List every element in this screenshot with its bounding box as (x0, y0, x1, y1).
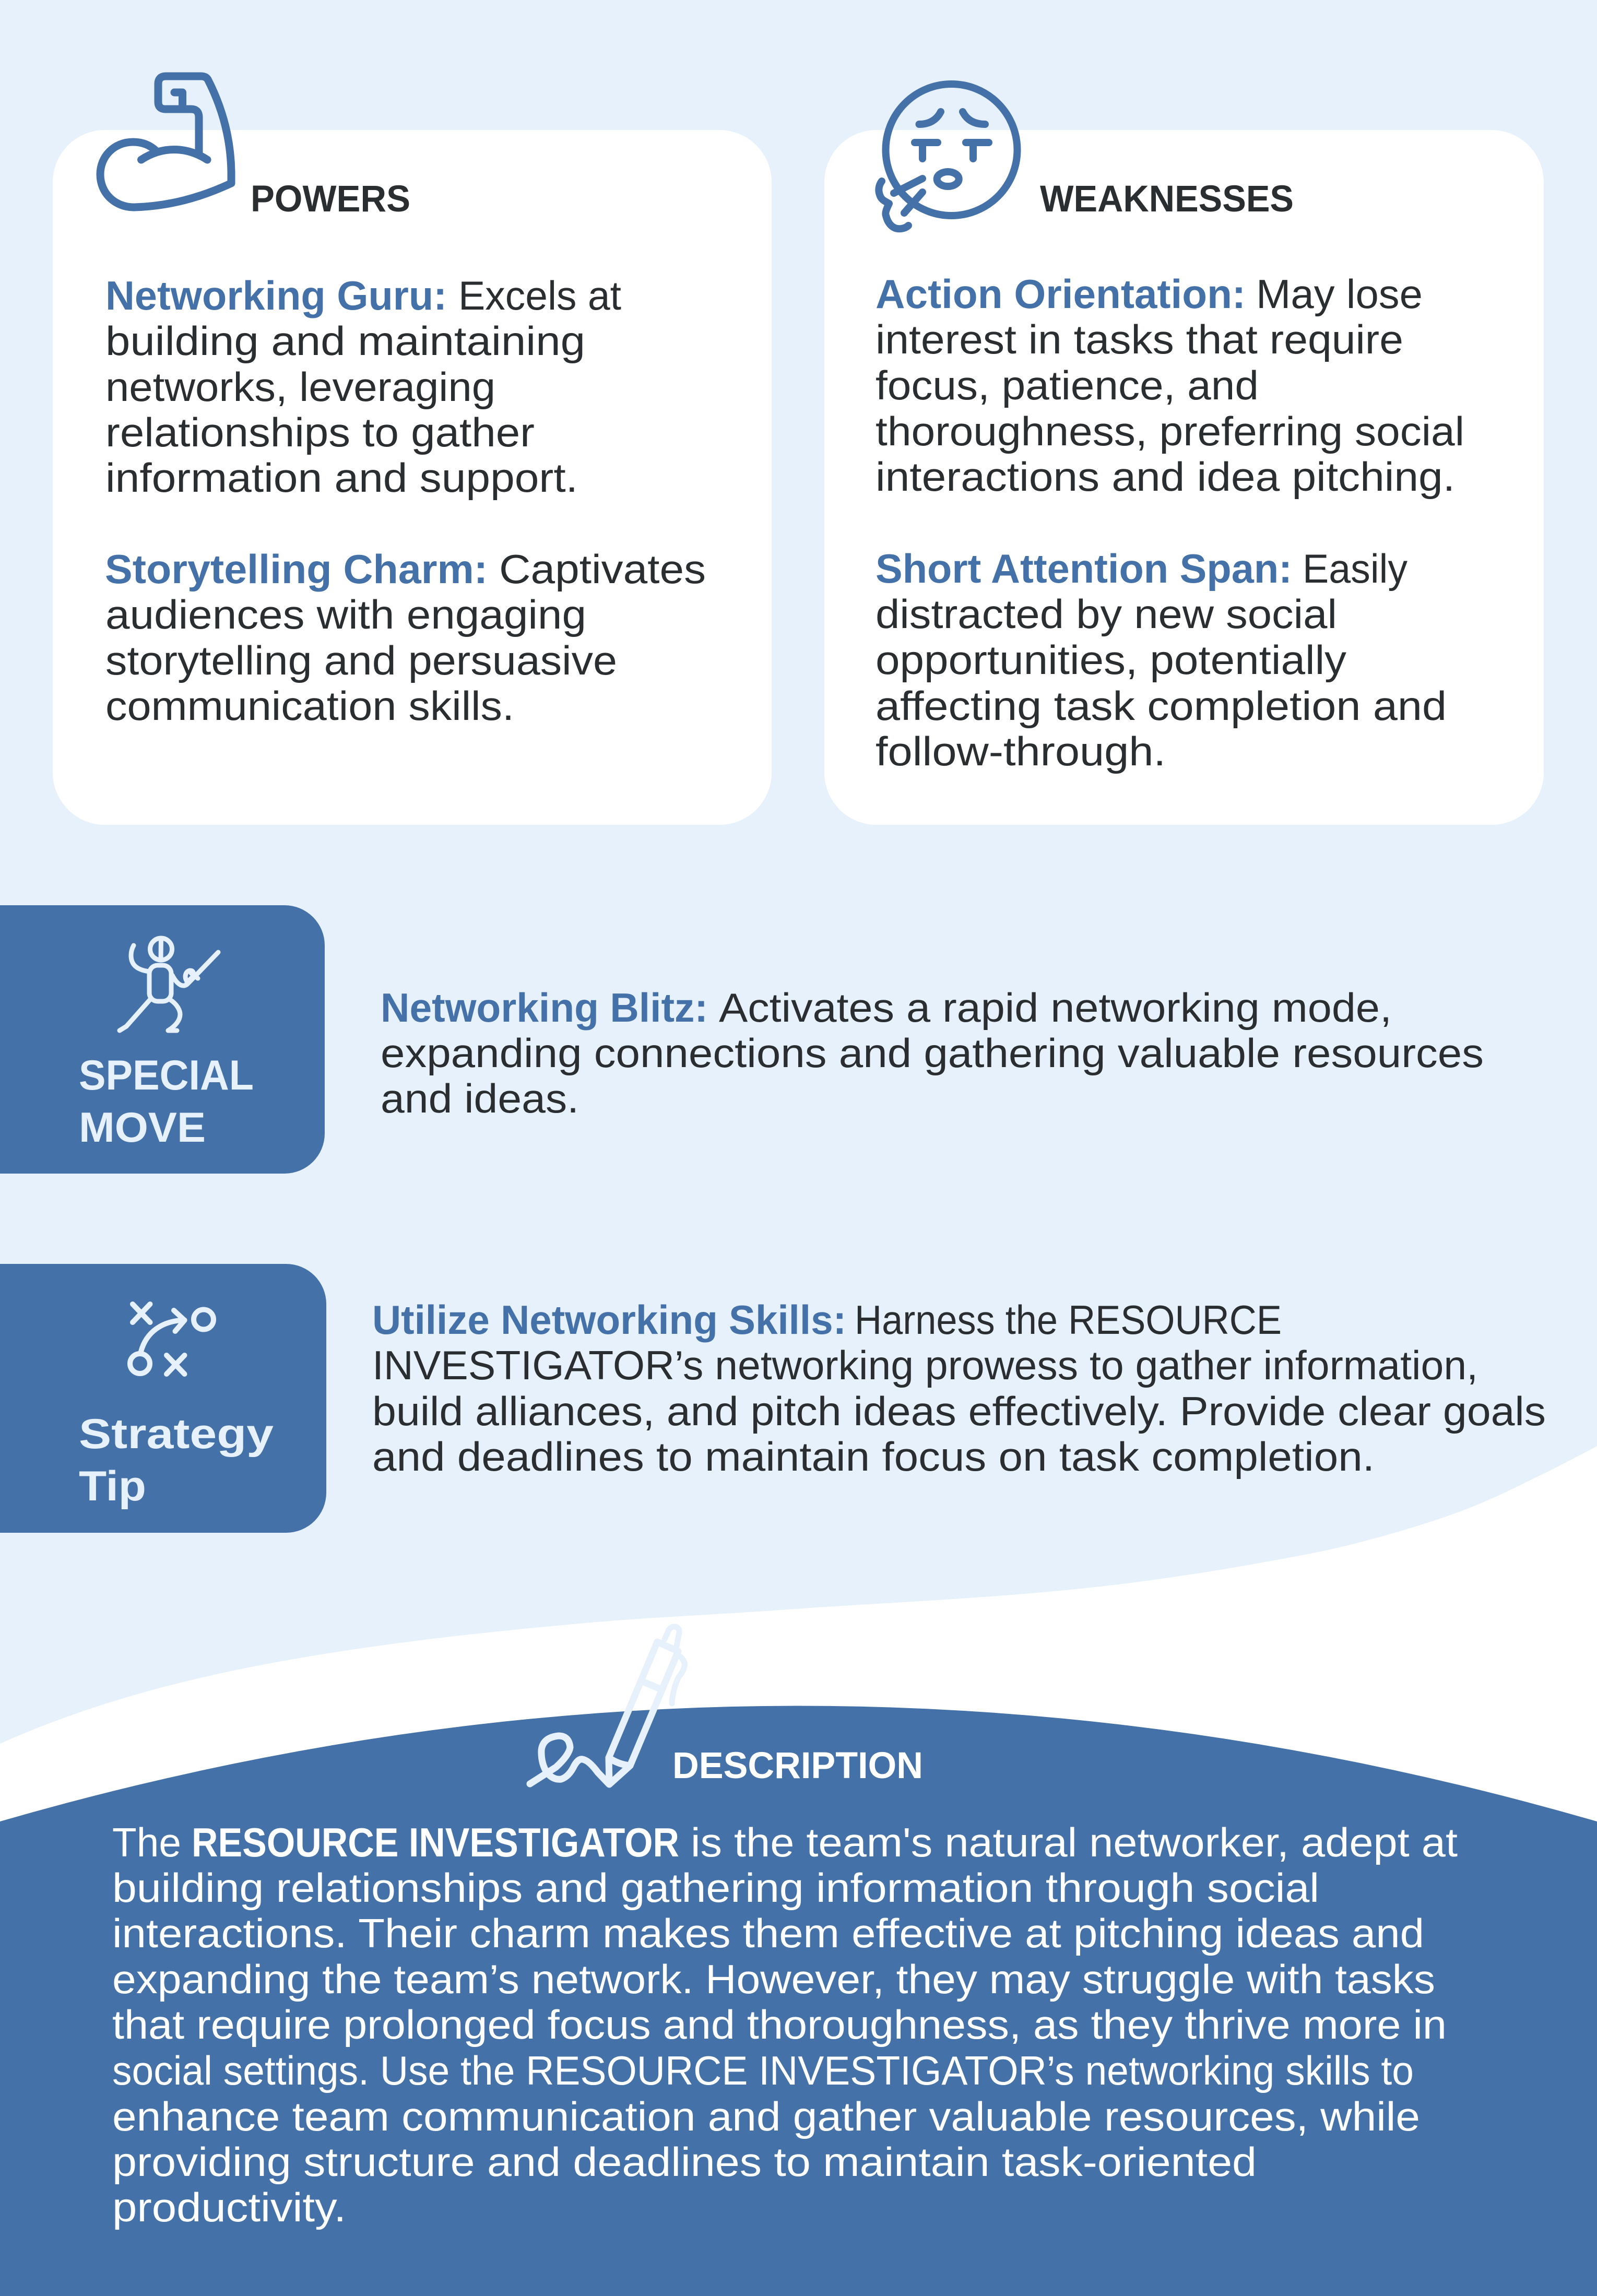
text: short attention span: follow-through. (876, 728, 1166, 774)
text: short attention span: affecting task completion and (876, 683, 1447, 729)
text: description body: enhance team communication and gather valuable resources, while (112, 2093, 1420, 2139)
text: networking blitz: Activates a rapid networking mode, (719, 985, 1392, 1031)
text: utilize networking skills: Utilize Networking Skills: (372, 1297, 846, 1343)
text: description body: providing structure and deadlines to maintain task-oriented (112, 2139, 1257, 2185)
text: action orientation: Action Orientation: (876, 271, 1246, 317)
text: description body: is the team's natural networker, adept at (691, 1819, 1458, 1865)
text: networking guru (105, 273, 621, 501)
label: strategy tip: Tip (79, 1463, 146, 1510)
panel: special move (0, 905, 325, 1174)
text: storytelling charm: audiences with engaging (105, 591, 586, 637)
text: networking guru: building and maintaining (105, 318, 585, 364)
text: action orientation (876, 271, 1464, 500)
icon: signing pen (530, 1627, 684, 1784)
label: special move: SPECIAL (79, 1052, 254, 1099)
panel: strategy tip (0, 1264, 326, 1533)
text: description body: that require prolonged focus and thoroughness, as they thrive more in (112, 2002, 1447, 2048)
text: action orientation: interest in tasks that require (876, 316, 1403, 362)
text: short attention span: Easily (1303, 546, 1407, 591)
text: description body: expanding the team’s network. However, they may struggle with tasks (112, 1956, 1435, 2002)
text: action orientation: thoroughness, preferring social (876, 408, 1464, 454)
text: networking blitz: expanding connections and gathering valuable resources (381, 1030, 1484, 1076)
white wave background (0, 1446, 1597, 2296)
icon: play diagram (130, 1304, 214, 1374)
text: description body: The (112, 1819, 181, 1865)
text: description body: social settings. Use the RESOURCE INVESTIGATOR’s networking skills to (112, 2048, 1414, 2093)
text: description body: RESOURCE INVESTIGATOR (192, 1819, 679, 1865)
panel: weaknesses (824, 84, 1544, 825)
icon: flexed muscle (100, 76, 231, 207)
text: description body: interactions. Their charm makes them effective at pitching ideas and (112, 1910, 1424, 1956)
text: networking blitz: Networking Blitz: (381, 985, 708, 1031)
text: description body: building relationships and gathering information through social (112, 1865, 1319, 1911)
text: short attention span: distracted by new social (876, 591, 1337, 637)
text: networking guru: information and support. (105, 455, 578, 501)
text: networking guru: relationships to gather (105, 409, 535, 455)
text: description body (112, 1819, 1458, 2230)
text: description body: productivity. (112, 2184, 346, 2230)
panel: description (112, 1627, 1458, 2230)
text: networking blitz: and ideas. (381, 1075, 579, 1121)
heading: powers: POWERS (251, 179, 410, 220)
blue dome background (0, 1706, 1597, 2296)
text: utilize networking skills: build alliances, and pitch ideas effectively. Provide clear goals (372, 1388, 1546, 1434)
text: utilize networking skills (372, 1297, 1546, 1480)
text: action orientation: May lose (1256, 271, 1423, 317)
heading: weaknesses: WEAKNESSES (1040, 179, 1294, 220)
text: action orientation: interactions and idea pitching. (876, 454, 1455, 500)
text: storytelling charm: storytelling and persuasive (105, 637, 617, 683)
icon: unwell face (879, 84, 1017, 229)
text: action orientation: focus, patience, and (876, 362, 1259, 408)
text: storytelling charm: Storytelling Charm: (105, 546, 488, 592)
text: networking guru: networks, leveraging (105, 364, 495, 410)
text: short attention span: Short Attention Span: (876, 546, 1292, 591)
text: utilize networking skills: and deadlines to maintain focus on task completion. (372, 1434, 1375, 1480)
text: networking blitz (381, 985, 1484, 1121)
label: special move (79, 1052, 254, 1151)
text: storytelling charm: Captivates (499, 546, 706, 592)
text: short attention span: opportunities, potentially (876, 637, 1346, 683)
text: utilize networking skills: Harness the RESOURCE (855, 1297, 1282, 1343)
heading: description: DESCRIPTION (672, 1745, 923, 1786)
text: networking guru: Excels at (458, 273, 621, 318)
label: strategy tip (79, 1411, 274, 1510)
panel: powers (53, 76, 772, 825)
icon: fencer (120, 938, 218, 1031)
label: strategy tip: Strategy (79, 1411, 274, 1458)
text: utilize networking skills: INVESTIGATOR’s networking prowess to gather information, (372, 1342, 1478, 1388)
text: storytelling charm (105, 546, 706, 729)
text: storytelling charm: communication skills. (105, 683, 514, 729)
text: networking guru: Networking Guru: (105, 273, 447, 318)
label: special move: MOVE (79, 1104, 206, 1151)
text: short attention span (876, 546, 1447, 774)
